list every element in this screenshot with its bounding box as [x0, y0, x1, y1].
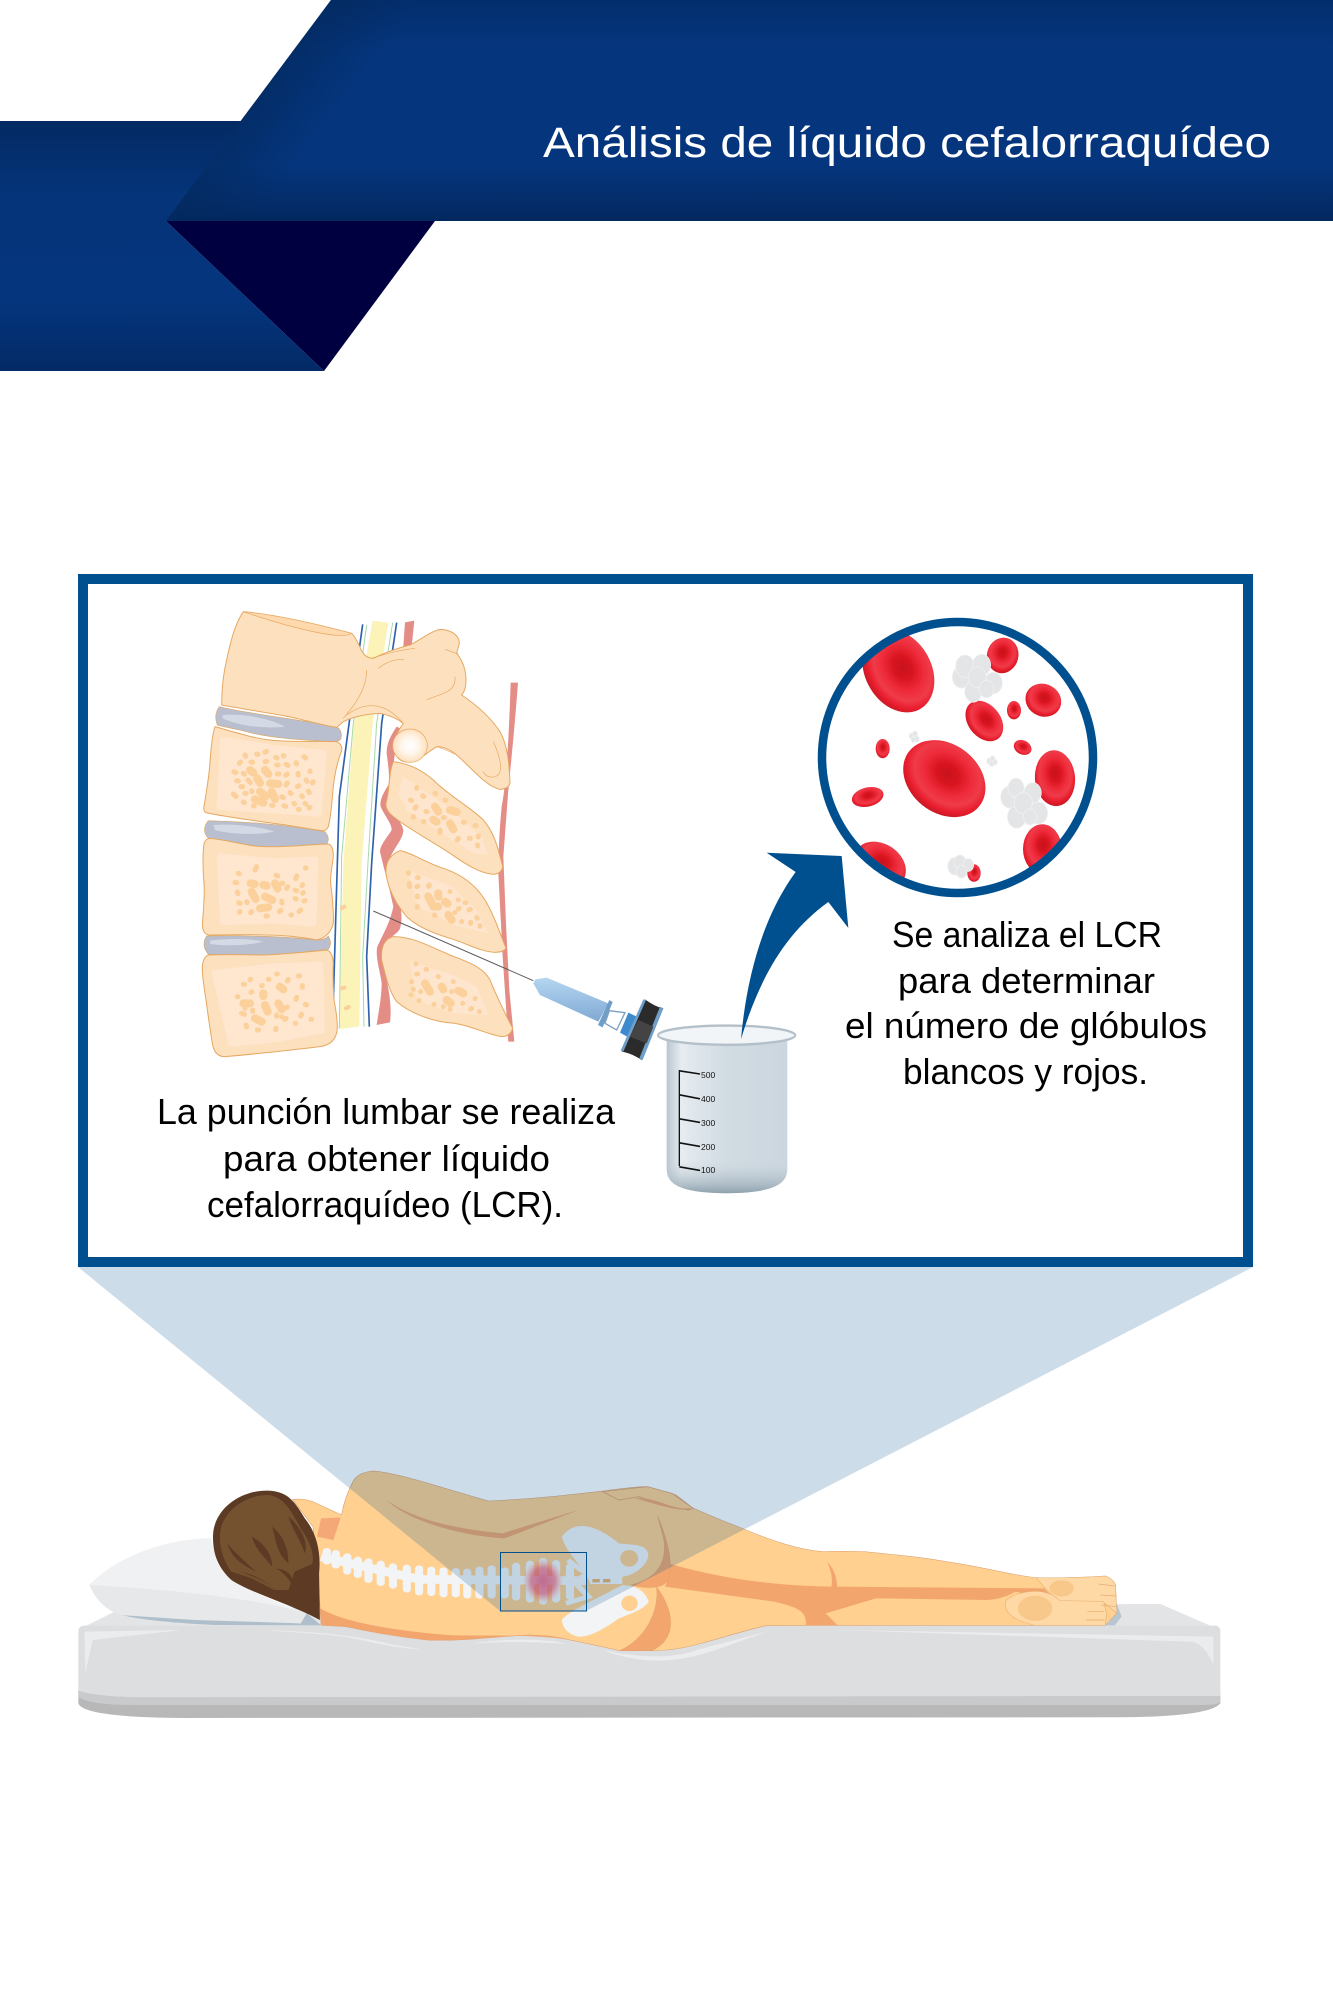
arrow [741, 853, 848, 1039]
scale labels: 200 [701, 1142, 715, 1152]
mattress highlights [84, 1630, 1213, 1673]
left caption: cefalorraquídeo (LCR). [207, 1184, 563, 1225]
syringe cap [622, 999, 663, 1060]
white blood cell clusters [909, 654, 1048, 878]
right caption: para determinar [898, 960, 1155, 1001]
inner bone areas [215, 740, 323, 1043]
left caption: La punción lumbar se realiza [157, 1091, 616, 1132]
left caption [157, 1091, 616, 1225]
top vertebra [222, 612, 510, 789]
highlighted puncture area [500, 1552, 586, 1611]
pillow [89, 1538, 306, 1623]
spinous processes [381, 762, 513, 1037]
cells clipped by lens [848, 612, 1079, 897]
bottom foot [1005, 1591, 1107, 1625]
patient lying on side [213, 1471, 1122, 1651]
right caption [845, 914, 1207, 1092]
body silhouette [293, 1471, 1117, 1651]
banner left ribbon [0, 121, 324, 371]
red blood cells [848, 612, 1079, 897]
nerve lines [333, 623, 397, 1027]
syringe connector [620, 1013, 638, 1037]
right caption: Se analiza el LCR [892, 914, 1162, 955]
pelvis upper wing [562, 1526, 648, 1584]
beaker body [667, 1040, 787, 1193]
mattress front [78, 1626, 1220, 1697]
facet joint [393, 729, 427, 762]
trabecular spots [233, 751, 480, 1030]
shoulder shadow [317, 1518, 341, 1540]
mattress base [78, 1687, 1220, 1718]
knee crease [827, 1562, 837, 1588]
hair [213, 1491, 320, 1620]
banner dark fold [166, 221, 435, 371]
spine [321, 1551, 588, 1603]
vertebral bodies [202, 727, 342, 1057]
mattress side band [78, 1691, 1220, 1705]
title: Análisis de líquido cefalorraquídeo [543, 119, 1271, 167]
pillow shadow [119, 1613, 321, 1625]
discs [204, 707, 341, 955]
header banner [0, 0, 1333, 371]
needle [373, 911, 533, 981]
scale labels: 400 [701, 1094, 715, 1104]
projection wedge [78, 1267, 1253, 1611]
right caption: blancos y rojos. [903, 1051, 1148, 1092]
top vertebra details [343, 648, 501, 777]
microscope view of blood cells [822, 612, 1093, 897]
beaker [658, 1026, 795, 1193]
banner top ribbon [166, 0, 1333, 221]
beaker rim [658, 1026, 795, 1045]
foot shadow on mattress [1105, 1603, 1122, 1625]
scale labels: 500 [701, 1070, 715, 1080]
ligaments [377, 621, 518, 1042]
lower buttock shadow [620, 1587, 671, 1651]
upper buttock fold [631, 1516, 670, 1588]
detail panel frame [83, 579, 1248, 1262]
pelvis lower wing [562, 1585, 649, 1637]
beaker scale [679, 1071, 700, 1170]
scale labels: 300 [701, 1118, 715, 1128]
zoom box [500, 1552, 586, 1611]
puncture glow [523, 1559, 563, 1603]
top foot [1036, 1576, 1117, 1613]
leg shadows [665, 1563, 1058, 1625]
arm and hand [603, 1487, 693, 1510]
spinal cord [339, 621, 388, 1029]
mattress and pillow [78, 1538, 1220, 1718]
scale labels [701, 1070, 715, 1175]
mattress top surface [84, 1604, 1220, 1630]
scale labels: 100 [701, 1165, 715, 1175]
left caption: para obtener líquido [223, 1138, 550, 1179]
needle hub [533, 978, 608, 1022]
waist crease [386, 1500, 580, 1538]
spine illustration [202, 612, 663, 1060]
right caption: el número de glóbulos [845, 1005, 1207, 1046]
torso underside shadow [320, 1608, 620, 1651]
lens ring [822, 622, 1093, 893]
